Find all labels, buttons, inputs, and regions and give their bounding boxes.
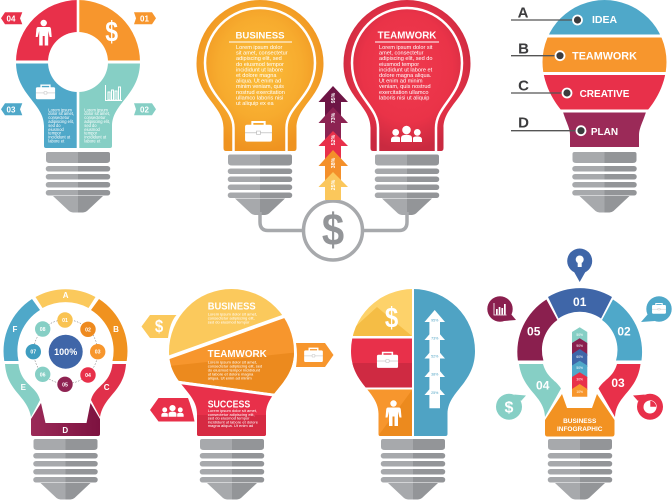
heading: BUSINESS (235, 30, 285, 42)
body text: adipiscing elit, sed do (379, 56, 432, 62)
quadrant segments (16, 0, 140, 148)
circle (304, 201, 362, 260)
band labels: TEAMWORK (572, 50, 637, 62)
band labels: PLAN (591, 127, 618, 138)
text block left: eiusmod (48, 127, 64, 132)
body text (379, 45, 433, 101)
centre 100%: 100% (54, 347, 77, 357)
central arrow stack (572, 327, 587, 397)
tag: people (150, 398, 194, 422)
body text: ut aliquip ex ea (236, 101, 275, 107)
segments (351, 289, 475, 436)
centre hole (48, 32, 108, 92)
segment 03: 03 (611, 376, 625, 390)
segment C: C (104, 383, 110, 392)
callout D (511, 114, 586, 135)
icon: dollar: $ (105, 15, 119, 48)
callout D: D (518, 114, 529, 132)
segment A (36, 289, 96, 308)
orange base panel (545, 394, 614, 436)
body text: aliqua. Ut enim ad (236, 79, 281, 85)
tag 04: 04 (7, 14, 16, 23)
text block left (48, 107, 74, 144)
arrow 73%: 73% (331, 112, 337, 123)
text success: incididunt ut labore et dolore (208, 419, 259, 424)
connector wires and dollar circle (260, 201, 407, 260)
white arrow stack: 38% (431, 372, 439, 376)
nodes 01-08: 05 (62, 382, 68, 388)
callout A: A (518, 4, 529, 22)
orange base panel: INFOGRAPHIC (557, 426, 603, 433)
icon: bar chart (106, 85, 122, 100)
segment 03 (598, 364, 640, 417)
white arrow stack: 25% (431, 391, 439, 395)
body text: Lorem ipsum dolor sit (379, 45, 433, 51)
body text: exercitation ullamco (379, 90, 428, 96)
text block right: labore et (84, 138, 101, 144)
body text: Ut enim ad minim (379, 79, 423, 85)
tag 03: 03 (7, 105, 16, 114)
segment 04: 04 (536, 378, 550, 392)
inner outline (352, 8, 462, 151)
arrow 25%: 25% (331, 179, 337, 190)
text teamwork: do eiusmod tempor incididunt (208, 367, 261, 372)
bulb 7: five segment ring with callouts (487, 248, 672, 500)
segment 05: 05 (527, 324, 541, 338)
text business: sed do eiusmod tempor (208, 320, 250, 324)
nodes 01-08: 01 (62, 318, 68, 324)
body text: eiusmod tempor (379, 62, 419, 68)
icon: briefcase (36, 85, 55, 99)
arrow 38%: 38% (331, 157, 337, 168)
bulb 4: ring with numbered nodes (4, 289, 127, 500)
segment 04 (519, 364, 561, 417)
tag: dollar (142, 315, 176, 338)
segment 02 (602, 300, 642, 360)
body text: do eiusmod tempor (236, 62, 284, 68)
central arrow stack: 30% (576, 378, 583, 382)
bands (542, 0, 666, 147)
icon: person (386, 400, 402, 426)
icon: person (36, 20, 52, 46)
dashed ring (34, 320, 98, 384)
text block left: dolor sit amet, (48, 111, 74, 116)
segment A: A (63, 291, 69, 300)
callout C: C (518, 78, 529, 94)
white arrow stack: 52% (431, 354, 439, 358)
arrow 95%: 95% (331, 92, 337, 103)
segment 01 (548, 288, 612, 318)
bulb 3: labelled bands (511, 0, 672, 212)
callout C (511, 78, 572, 98)
text block right: sed do (84, 123, 97, 128)
callout: bar chart (487, 296, 516, 322)
segment 01: 01 (573, 295, 587, 309)
body text: amet, consectetur (379, 51, 424, 57)
lamp base (200, 439, 264, 500)
tag 02: 02 (140, 105, 149, 114)
tag 03 (1, 103, 22, 115)
central arrow stack: 60% (576, 355, 583, 359)
text block right: adipiscing elit, (84, 119, 110, 124)
callout B (511, 40, 564, 60)
nodes 01-08 (26, 312, 105, 392)
central arrow stack: 10% (576, 390, 583, 394)
text block right: eiusmod (84, 127, 100, 132)
white arrow stack: 95% (431, 318, 439, 322)
callout: briefcase (641, 296, 672, 322)
tag 01: 01 (140, 14, 149, 23)
central arrow stack: 50% (576, 366, 583, 370)
body text: veniam, quis nostrud (379, 84, 431, 90)
text teamwork: ut labore et dolore magna (208, 371, 254, 376)
text block left: sed do (48, 123, 61, 128)
segment E (5, 364, 40, 417)
segment E: E (21, 383, 27, 392)
lamp base (381, 439, 445, 500)
callout: pie chart (633, 394, 663, 420)
red glass (344, 0, 470, 151)
callout: idea bulb (567, 248, 592, 282)
heading teamwork: TEAMWORK (208, 349, 267, 360)
body text: minim veniam, quis (236, 84, 284, 90)
body text: incididunt ut labore et (379, 67, 433, 73)
wires (260, 212, 407, 230)
text block left: tempor (48, 131, 62, 136)
nodes 01-08: 02 (85, 327, 91, 333)
text business (208, 312, 257, 324)
text block left: adipiscing elit, (48, 119, 74, 124)
text block right: incididunt ut (84, 135, 107, 140)
text block left: labore et (48, 138, 65, 144)
orange glass (196, 0, 324, 151)
lamp base (33, 439, 98, 500)
icon: briefcase (245, 122, 272, 142)
central arrow stack: 90% (576, 344, 583, 348)
white arrow stack (424, 310, 445, 408)
centre 100% (49, 335, 83, 369)
nodes 01-08: 03 (95, 350, 101, 356)
icon: dollar: $ (322, 205, 344, 256)
band labels: CREATIVE (580, 89, 630, 100)
segment C (91, 364, 126, 417)
icon: people (391, 126, 422, 142)
inner outline (205, 8, 315, 151)
heading business: BUSINESS (208, 301, 256, 312)
bulb 1: four quadrant lightbulb (1, 0, 156, 212)
icon: dollar: $ (385, 301, 398, 334)
text success: consectetur adipiscing elit, (208, 412, 255, 417)
body text: laboris nisi ut aliquip (379, 95, 429, 101)
segment F (4, 299, 40, 361)
body text: et dolore magna (236, 73, 277, 79)
segment D: D (62, 426, 68, 435)
body text: ullamco laboris nisi (236, 95, 283, 101)
lamp base (375, 154, 439, 215)
icon: briefcase (377, 353, 398, 368)
callout: dollar (496, 394, 526, 420)
orange base panel: BUSINESS (563, 418, 597, 425)
segment B (91, 299, 127, 361)
body text (236, 45, 288, 107)
text teamwork: Lorem ipsum dolor sit amet, (208, 359, 257, 364)
bulb 2b: teamwork (344, 0, 470, 215)
white arrow stack: 73% (431, 336, 439, 340)
text success: Lorem ipsum dolor sit amet, (208, 408, 257, 413)
segment B: B (113, 325, 119, 334)
heading: TEAMWORK (378, 30, 436, 42)
callout: dollar: $ (505, 400, 514, 416)
body text: Lorem ipsum dolor (236, 45, 282, 51)
text block right (84, 107, 110, 144)
nodes 01-08: 04 (85, 373, 91, 379)
text teamwork: aliqua. Ut enim ad minim (208, 375, 252, 380)
text block left: incididunt ut (48, 135, 71, 140)
text block right: dolor sit amet, (84, 111, 110, 116)
nodes 01-08: 08 (40, 327, 46, 333)
callout B: B (518, 40, 529, 58)
segments (169, 289, 294, 436)
bulb 6: split with arrows (345, 285, 480, 500)
lamp base (228, 154, 292, 215)
body text: incididunt ut labore (236, 67, 283, 73)
text teamwork: consectetur adipiscing elit, sed (208, 363, 262, 368)
segment F: F (13, 325, 18, 334)
lamp base (46, 152, 110, 212)
rising arrows chart (318, 86, 348, 200)
tag 04 (1, 12, 22, 24)
central arrow stack: 50% (576, 333, 583, 337)
heading success: SUCCESS (208, 399, 250, 410)
tag: briefcase (296, 343, 334, 367)
nodes 01-08: 07 (30, 350, 36, 356)
text block left: Lorem ipsum (48, 107, 73, 112)
text block right: consectetur (84, 115, 106, 120)
text success: magna aliqua. Ut enim ad (208, 423, 253, 428)
text block left: consectetur (48, 115, 70, 120)
segment 02: 02 (617, 324, 631, 338)
text business: Lorem ipsum dolor sit amet, (208, 312, 257, 316)
bulb 5: business teamwork success (142, 280, 334, 500)
text success (208, 408, 259, 428)
body text: dolore magna aliqua. (379, 73, 432, 79)
text block right: tempor (84, 131, 98, 136)
text business: consectetur adipiscing elit, (208, 316, 255, 320)
bulb 2: business (196, 0, 324, 215)
tag 01 (134, 12, 156, 24)
segment 05 (517, 300, 557, 360)
tag: dollar: $ (155, 317, 163, 336)
segment D (31, 403, 100, 436)
tag 02 (134, 103, 156, 115)
arrow 52%: 52% (331, 134, 337, 145)
band labels: IDEA (592, 14, 617, 26)
lamp base (548, 439, 612, 500)
body text: nostrud exercitation (236, 90, 285, 96)
text teamwork (208, 359, 262, 380)
callout A (511, 4, 582, 24)
text block right: Lorem ipsum (84, 107, 109, 112)
body text: sit amet, consectetur (236, 51, 288, 57)
band labels (572, 14, 637, 138)
text success: sed do eiusmod tempor (208, 416, 250, 421)
nodes 01-08: 06 (40, 372, 46, 378)
body text: adipiscing elit, sed (236, 56, 282, 62)
lamp base (572, 152, 637, 212)
